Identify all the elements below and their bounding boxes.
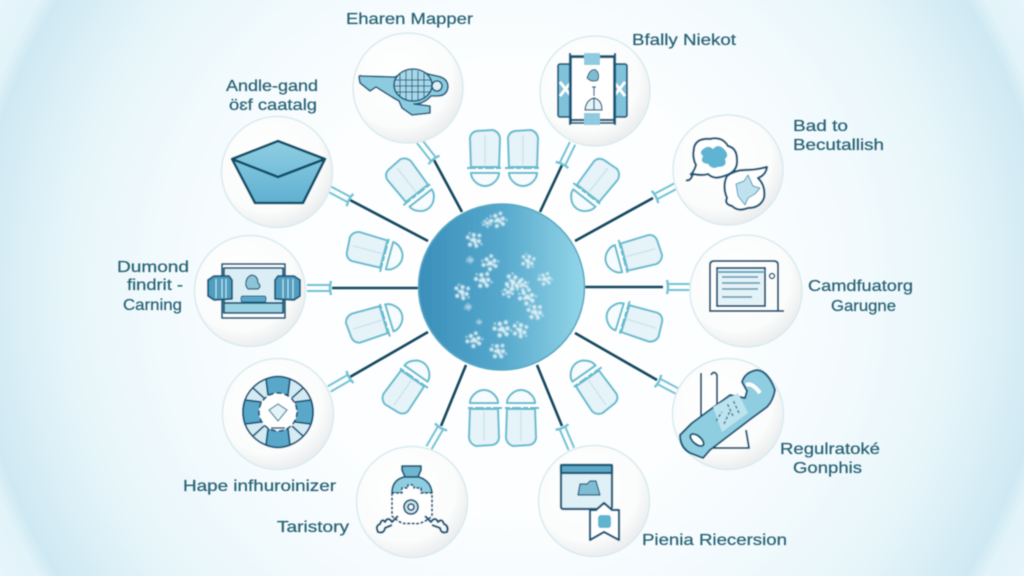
panel: Hape infhuroinizer (183, 358, 337, 495)
icon: capsule upper left (380, 153, 443, 219)
icon: two blobs (686, 138, 767, 210)
label: Hape infhuroinizer (183, 478, 337, 495)
icon: capsule top 1 (467, 130, 503, 186)
capsule icons ring (343, 130, 666, 446)
node circle (690, 235, 802, 347)
label: Eharen Mapper (346, 11, 474, 28)
icon: capsule right upper (601, 230, 665, 279)
panel: Camdfuatorg Garugne (690, 235, 913, 347)
icon: capsule lower left (377, 353, 438, 419)
icon: tag clamp on stand (680, 370, 775, 458)
label (780, 441, 880, 477)
icon: capsule upper right (562, 153, 625, 219)
label: Regulratoké (780, 441, 880, 458)
icon: monitor with side units (208, 264, 300, 318)
label: Garugne (831, 298, 896, 315)
spokes: dark connector lines (332, 160, 663, 426)
label (793, 118, 884, 154)
label (117, 259, 189, 314)
label (808, 278, 913, 315)
icon: capsule left lower (343, 297, 407, 348)
central sphere (418, 204, 584, 370)
panel: Bfally Niekot (540, 32, 737, 146)
node circle (538, 446, 650, 556)
icon: framed panels (558, 53, 627, 125)
icon: ring wheel (243, 376, 313, 448)
connector stubs (307, 137, 691, 452)
node circle (222, 358, 334, 470)
icon: capsule left upper (343, 227, 407, 276)
panel: Taristory (277, 446, 468, 558)
label: Gonphis (793, 460, 862, 477)
label (226, 78, 318, 114)
label: Dumond (117, 259, 189, 276)
label: Carning (123, 297, 182, 314)
icon: window and bookmark (561, 465, 619, 540)
node circle (673, 115, 783, 225)
icon: pentagon envelope (232, 141, 325, 203)
label: Bfally Niekot (632, 32, 737, 49)
panel: Eharen Mapper (346, 11, 474, 143)
panel: Bad to Becutallish (673, 115, 884, 225)
label: Bad to (793, 118, 848, 135)
icon: capsule right lower (602, 296, 666, 347)
panel: Andle-gand caatalg (222, 78, 332, 228)
icon: capsule top 2 (505, 130, 541, 186)
icon: key with racket head (359, 69, 448, 115)
icon: capsule lower right (562, 353, 623, 419)
panel: Regulratoke Gonphis (672, 358, 880, 477)
icon: capsule bottom 1 (466, 390, 502, 446)
node circle (353, 33, 463, 143)
label: Becutallish (793, 137, 884, 154)
label: Camdfuatorg (808, 278, 913, 295)
label: findrit - (127, 277, 183, 294)
label: öɛf caatalg (229, 97, 317, 114)
node circle (672, 358, 784, 470)
icon: bottle with ornaments (377, 466, 448, 532)
node circle (222, 116, 332, 228)
node circle (540, 36, 650, 146)
label: Pienia Riecersion (642, 532, 787, 549)
node circle (194, 236, 306, 346)
panel: Dumond findrit Carning (117, 236, 306, 346)
node circle (356, 446, 468, 558)
label: Taristory (277, 519, 349, 536)
label: Andle-gand (226, 78, 318, 95)
panel: Pienia Riecersion (538, 446, 787, 556)
icon: window screen (710, 261, 784, 311)
icon: capsule bottom 2 (503, 390, 539, 446)
